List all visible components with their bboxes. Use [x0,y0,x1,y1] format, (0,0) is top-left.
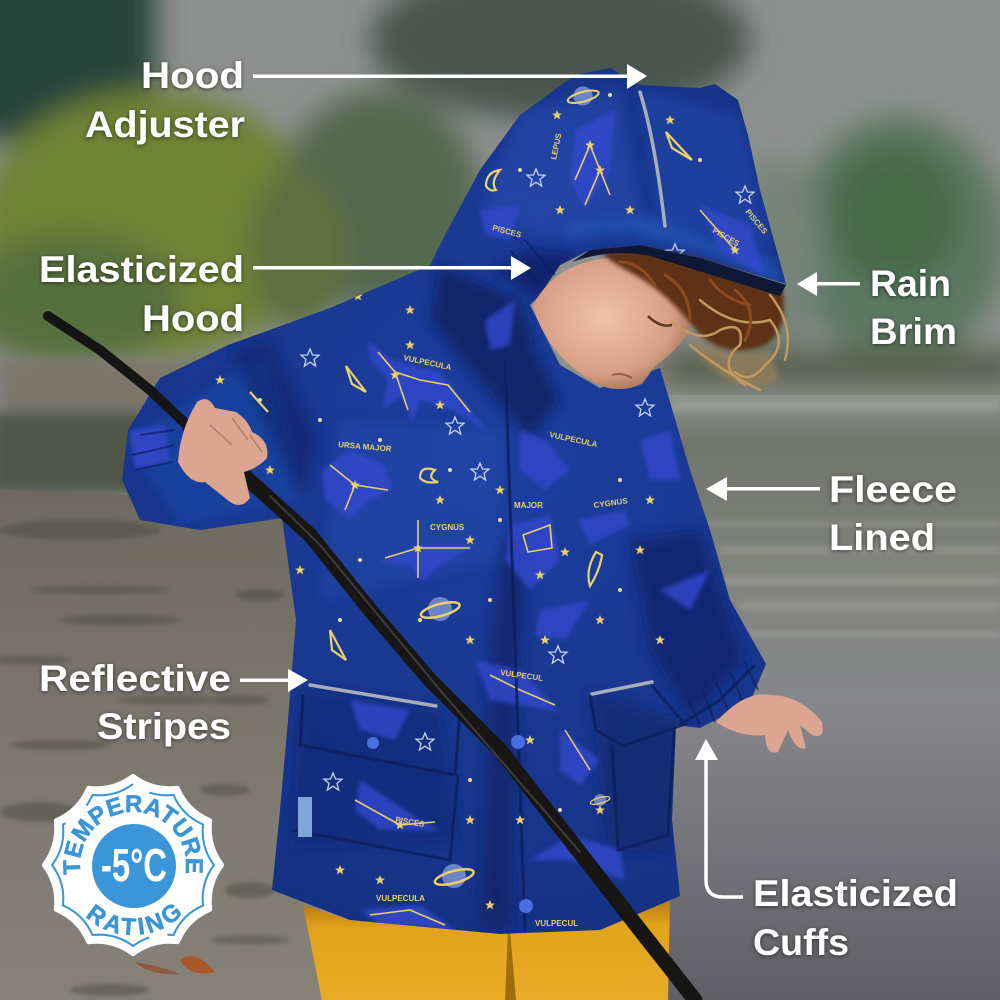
stars and dots print [215,86,770,928]
stick [48,316,695,1000]
arrow: elasticized hood [253,256,531,280]
arrow: rain brim [797,272,860,296]
jacket shading [125,90,786,930]
label: fleece lined: Fleece [829,469,957,510]
label: reflective stripes: Stripes [97,706,231,747]
stars and dots print: VULPECULA [403,353,452,372]
face [533,258,690,389]
badge: temperature rating: -5°C [101,839,167,891]
label: hood adjuster: Adjuster [85,104,245,145]
pants [303,900,670,1000]
pockets [292,360,755,930]
arrow: hood adjuster [253,64,647,89]
badge: temperature rating: RATING [86,904,181,936]
stars and dots print: VULPECUL [500,668,544,683]
hands [178,399,823,753]
stars and dots print: VULPECUL [535,919,578,928]
label: elasticized hood [39,249,244,339]
stars and dots print: VULPECULA [376,894,425,903]
label: fleece lined [829,469,957,558]
arrow: fleece lined [706,477,820,501]
stars and dots print: VULPECULA [549,430,598,449]
stars and dots print: CYGNUS [430,523,465,532]
stars and dots print: PISCES [711,226,741,249]
label: reflective stripes: Reflective [39,658,231,699]
stars and dots print: PISCES [491,223,523,240]
label: fleece lined: Lined [829,517,935,558]
label: elasticized cuffs [753,873,958,963]
stars and dots print: LEPUS [549,132,564,160]
label: hood adjuster: Hood [141,55,244,96]
gold constellation lines [330,145,735,925]
stars and dots print: PISCES [395,815,426,829]
label: rain brim [870,263,957,352]
label: reflective stripes [39,658,231,747]
label: rain brim: Rain [870,263,951,304]
stars and dots print: URSA MAJOR [338,440,392,454]
stars and dots print: PISCES [743,208,770,236]
label: elasticized cuffs: Cuffs [753,922,849,963]
badge: temperature rating [42,774,224,956]
label: hood adjuster [85,55,245,145]
badge: temperature rating: TEMPERATURE [62,795,203,875]
label: elasticized cuffs: Elasticized [753,873,958,914]
constellation animals print [130,110,765,930]
stars and dots print: MAJOR [514,501,543,510]
jacket with hood [122,68,786,934]
label: rain brim: Brim [870,311,957,352]
reflective seam and stripes [310,92,665,706]
stars and dots print: CYGNUS [593,496,629,510]
arrow: reflective stripes [240,669,308,692]
label: elasticized hood: Elasticized [39,249,244,290]
arrow: elasticized cuffs [695,739,743,897]
curly hair [572,245,788,390]
cuff gathers [132,240,758,725]
label: elasticized hood: Hood [142,298,244,339]
